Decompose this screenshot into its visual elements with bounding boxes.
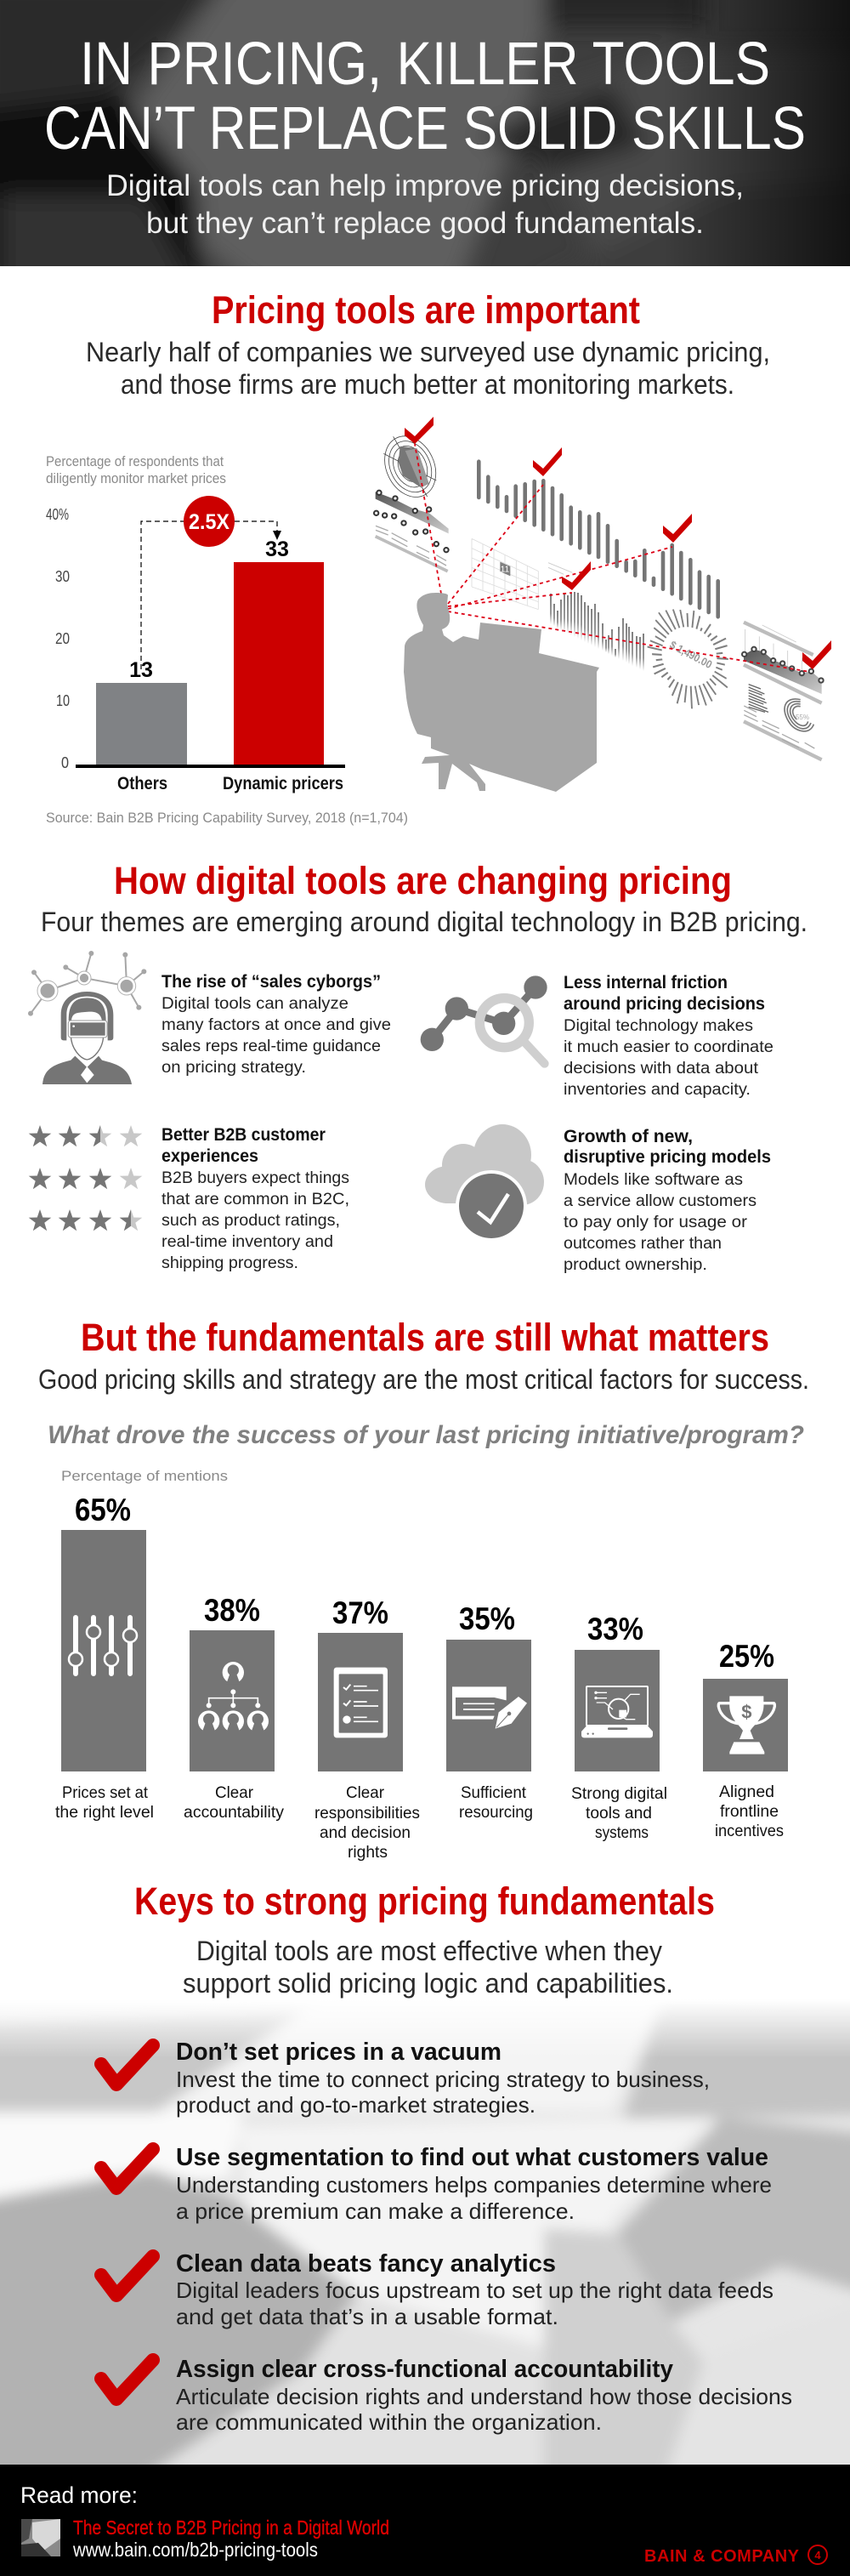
bar: aligned frontline incentives: incentives	[715, 1823, 784, 1840]
icon: checklist tablet	[334, 1668, 388, 1737]
dashboard: right panel	[742, 623, 824, 759]
bar: clear responsibilities: 37%	[332, 1595, 388, 1630]
article title link: The Secret to B2B Pricing in a Digital World	[73, 2516, 389, 2539]
source note: Source: Bain B2B Pricing Capability Survey, 2018 (n=1,704)	[46, 810, 408, 826]
subtitle: Digital tools can help improve pricing decisions,	[106, 169, 744, 202]
heading: pricing tools are important: Pricing tools are important	[212, 288, 640, 332]
bar: sufficient resourcing: resourcing	[459, 1804, 533, 1822]
chart question: What drove the success of your last pricing initiative/program?	[48, 1421, 804, 1449]
key: clean data	[101, 2250, 774, 2329]
bar: strong digital tools: Strong digital	[571, 1785, 667, 1803]
heading: keys to strong pricing fundamentals: Keys to strong pricing fundamentals	[134, 1879, 715, 1923]
intro text: digital tools effective: support solid pricing logic and capabilities.	[183, 1968, 673, 1999]
text: disruptive pricing models: a service allow customers	[564, 1192, 756, 1210]
title: IN PRICING, KILLER TOOLS	[80, 31, 770, 98]
text: better customer experiences: real-time inventory and	[162, 1233, 333, 1251]
key: don't set prices in a vacuum: Don’t set prices in a vacuum	[176, 2039, 502, 2066]
text: better customer experiences: Better B2B customer	[162, 1125, 326, 1145]
bar: aligned frontline incentives: frontline	[720, 1803, 779, 1821]
icon: sliders	[69, 1618, 137, 1674]
bar: strong digital tools: 33%	[587, 1612, 643, 1646]
bar chart: market monitoring	[46, 453, 345, 793]
y axis labels: 0	[61, 754, 69, 771]
intro text: four themes: Four themes are emerging around digital technology in B2B pricing.	[41, 907, 808, 937]
key: clean data: Digital leaders focus upstream to set up the right data feeds	[176, 2277, 774, 2303]
icon: star ratings	[29, 1125, 142, 1231]
callout: 2.5X	[184, 496, 235, 547]
theme: disruptive pricing models	[425, 1124, 771, 1274]
hero background photo	[0, 0, 850, 289]
bar: strong digital tools	[571, 1612, 667, 1842]
intro text: digital tools effective	[183, 1936, 673, 1999]
text: better customer experiences	[162, 1125, 349, 1272]
text: less internal friction: it much easier to coordinate	[564, 1038, 774, 1056]
icon: laptop	[581, 1686, 653, 1737]
text: disruptive pricing models: outcomes rather than	[564, 1235, 722, 1253]
icon: trophy	[718, 1696, 774, 1754]
text: better customer experiences: B2B buyers expect things	[162, 1169, 349, 1187]
intro text: digital tools effective: Digital tools are most effective when they	[196, 1936, 662, 1966]
theme: sales cyborgs	[28, 951, 391, 1084]
text: sales cyborgs: The rise of “sales cyborgs”	[162, 972, 381, 992]
heading: how digital tools are changing pricing: How digital tools are changing pricing	[114, 859, 732, 902]
bar: others	[96, 683, 187, 765]
chart caption	[46, 453, 226, 486]
text: disruptive pricing models: disruptive pricing models	[564, 1147, 771, 1167]
bar: aligned frontline incentives: Aligned	[719, 1783, 774, 1801]
text: disruptive pricing models: Models like software as	[564, 1171, 743, 1189]
text: less internal friction: Less internal friction	[564, 973, 728, 992]
category labels	[117, 774, 343, 793]
bar: dynamic pricers	[234, 562, 324, 765]
bar: clear responsibilities	[314, 1595, 420, 1862]
text: disruptive pricing models: Growth of new,	[564, 1127, 693, 1146]
key: use segmentation: a price premium can make a difference.	[176, 2198, 575, 2224]
icon: trophy: $	[741, 1702, 751, 1723]
background photo: keys section	[0, 2008, 850, 2465]
hero banner	[0, 0, 850, 289]
radial price gauge	[643, 601, 734, 716]
bar: clear accountability: 38%	[204, 1593, 260, 1628]
key: don't set prices in a vacuum: Invest the time to connect pricing strategy to business,	[176, 2067, 710, 2092]
intro text: dynamic pricing: and those firms are much better at monitoring markets.	[121, 369, 734, 400]
theme: better customer experiences	[29, 1125, 349, 1272]
bar: clear accountability: Clear	[215, 1784, 254, 1802]
icon: check	[101, 2360, 153, 2399]
key: assign accountability: are communicated within the organization.	[176, 2409, 602, 2435]
icon: form and pen	[452, 1686, 527, 1729]
thumbnail photo	[21, 2519, 60, 2556]
radial price gauge: $ 1,490.00	[668, 638, 714, 671]
chart caption: percentage of mentions: Percentage of mentions	[61, 1468, 228, 1484]
category labels: Dynamic pricers	[223, 774, 343, 793]
text: sales cyborgs: many factors at once and give	[162, 1016, 391, 1034]
person and desk silhouette	[404, 593, 599, 792]
subtitle: but they can’t replace good fundamentals.	[146, 207, 704, 240]
y axis labels: 10	[56, 692, 70, 709]
bar: aligned frontline incentives	[703, 1639, 788, 1840]
intro text: dynamic pricing: Nearly half of companies we surveyed use dynamic pricing,	[86, 337, 770, 367]
bar: sufficient resourcing: Sufficient	[461, 1784, 527, 1802]
key: clean data: and get data that’s in a usable format.	[176, 2304, 558, 2329]
histogram panel	[550, 592, 644, 671]
article url: www.bain.com/b2b-pricing-tools	[72, 2539, 318, 2561]
text: better customer experiences: such as product ratings,	[162, 1212, 340, 1230]
text: less internal friction: inventories and capacity.	[564, 1081, 751, 1099]
intro text: dynamic pricing	[86, 337, 770, 400]
bar: clear accountability	[184, 1593, 285, 1822]
bar: strong digital tools: systems	[595, 1824, 649, 1842]
text: sales cyborgs: Digital tools can analyze	[162, 995, 348, 1013]
read more label: Read more:	[20, 2482, 138, 2508]
heading: fundamentals still matter: But the fundamentals are still what matters	[81, 1316, 769, 1359]
text: better customer experiences: experiences	[162, 1146, 258, 1166]
text: sales cyborgs: sales reps real-time guidance	[162, 1038, 381, 1055]
bar: clear responsibilities: Clear	[346, 1784, 385, 1802]
text: disruptive pricing models	[564, 1127, 771, 1274]
dashboard: left panel	[374, 428, 449, 571]
text: sales cyborgs: on pricing strategy.	[162, 1059, 306, 1077]
value: 13: 13	[129, 658, 153, 682]
key: use segmentation: Understanding customers helps companies determine where	[176, 2172, 772, 2198]
value: 33: 33	[265, 537, 289, 561]
callout: 2.5X: 2.5X	[189, 510, 230, 534]
bar: prices set at the right level: 65%	[75, 1493, 131, 1527]
bar: clear responsibilities: and decision	[320, 1824, 411, 1842]
subtitle	[106, 169, 744, 240]
bar: prices set at the right level: Prices set at	[62, 1784, 149, 1802]
bar chart panel	[479, 462, 718, 617]
y axis labels: 40%	[46, 506, 69, 523]
key: assign accountability: Articulate decision rights and understand how those decisions	[176, 2384, 792, 2409]
footer	[0, 2465, 850, 2576]
y axis labels: 20	[55, 630, 70, 647]
text: less internal friction	[564, 973, 774, 1099]
theme: less internal friction	[421, 973, 774, 1099]
key: clean data: Clean data beats fancy analytics	[176, 2250, 556, 2277]
brand logo: BAIN & COMPANY	[644, 2547, 800, 2566]
bar: sufficient resourcing	[446, 1601, 533, 1822]
calendar panel: 11	[501, 566, 510, 575]
key: use segmentation: Use segmentation to find out what customers value	[176, 2144, 768, 2171]
text: less internal friction: around pricing decisions	[564, 994, 765, 1014]
dashboard: right panel: 55%	[796, 714, 809, 721]
dotted sight lines	[415, 444, 810, 672]
icon: cloud with check	[425, 1124, 544, 1242]
bar: strong digital tools: tools and	[586, 1805, 652, 1823]
bar: sufficient resourcing: 35%	[459, 1601, 515, 1636]
key: assign accountability: Assign clear cross-functional accountability	[176, 2356, 673, 2383]
dashed comparison arrow	[141, 521, 281, 669]
bar: prices set at the right level	[55, 1493, 154, 1822]
bar: prices set at the right level: the right level	[55, 1804, 154, 1822]
calendar panel	[472, 538, 572, 610]
illustration: analyst at desk with dashboards	[374, 417, 831, 792]
category labels: Others	[117, 774, 167, 793]
text: disruptive pricing models: to pay only for usage or	[564, 1214, 748, 1231]
bar: clear responsibilities: rights	[348, 1844, 388, 1862]
y axis labels	[46, 506, 70, 771]
title	[44, 31, 806, 162]
brand logo: 4	[814, 2549, 821, 2562]
text: better customer experiences: shipping progress.	[162, 1254, 298, 1272]
icon: check	[101, 2045, 153, 2084]
key: use segmentation	[101, 2144, 772, 2224]
icon: cyborg salesperson	[28, 951, 146, 1084]
text: sales cyborgs	[162, 972, 391, 1077]
chart caption: Percentage of respondents that	[46, 453, 224, 469]
chart caption: diligently monitor market prices	[46, 470, 226, 486]
key: don't set prices in a vacuum: product and go-to-market strategies.	[176, 2092, 536, 2118]
key: don't set prices in a vacuum	[101, 2039, 710, 2118]
icon: check	[101, 2149, 153, 2188]
text: disruptive pricing models: product ownership.	[564, 1256, 707, 1274]
text: less internal friction: Digital technology makes	[564, 1017, 753, 1035]
y axis labels: 30	[55, 568, 70, 585]
key: assign accountability	[101, 2356, 792, 2435]
icon: chart and magnifier	[421, 975, 547, 1064]
bar: aligned frontline incentives: 25%	[719, 1639, 774, 1674]
icon: check	[101, 2256, 153, 2295]
bar: clear accountability: accountability	[184, 1804, 285, 1822]
red check marks	[405, 417, 831, 669]
text: better customer experiences: that are common in B2C,	[162, 1191, 349, 1208]
text: less internal friction: decisions with data about	[564, 1060, 759, 1078]
bar: clear responsibilities: responsibilities	[314, 1805, 420, 1823]
icon: org chart	[198, 1662, 269, 1733]
